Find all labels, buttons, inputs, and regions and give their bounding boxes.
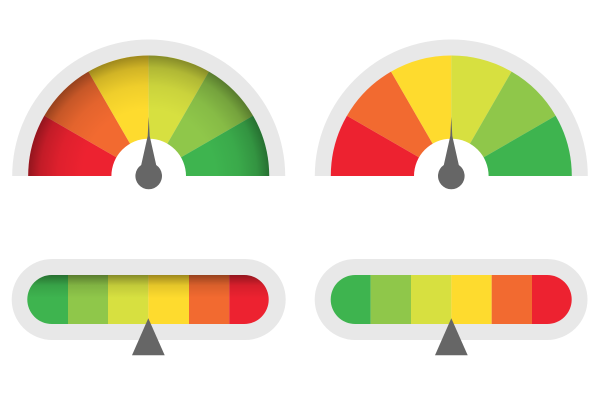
needle (135, 117, 162, 189)
pointer triangle (132, 318, 165, 355)
lime segment (149, 55, 209, 176)
yellow segment (391, 56, 451, 176)
green segment (149, 116, 269, 176)
inner rim shadow (28, 56, 269, 176)
shaded linear gauge (12, 259, 286, 355)
gauge bezel (315, 40, 588, 176)
lime segment (451, 55, 512, 176)
pointer triangle (435, 318, 468, 355)
shaded semicircular gauge (12, 40, 285, 189)
orange segment (44, 72, 149, 176)
light green segment (149, 72, 253, 176)
flat linear gauge (315, 259, 588, 355)
flat semicircular gauge (315, 40, 588, 189)
colour scale (330, 275, 572, 324)
colour scale (27, 275, 269, 324)
yellow segment (88, 56, 149, 176)
green segment (451, 116, 572, 176)
gauge bezel (12, 40, 285, 176)
red segment (331, 116, 451, 176)
white hub (414, 139, 489, 176)
bar bezel (12, 259, 286, 340)
bar bezel (315, 259, 588, 340)
light green segment (451, 72, 556, 176)
needle (438, 117, 465, 189)
red segment (28, 116, 149, 176)
white hub (111, 139, 186, 176)
orange segment (347, 72, 451, 176)
